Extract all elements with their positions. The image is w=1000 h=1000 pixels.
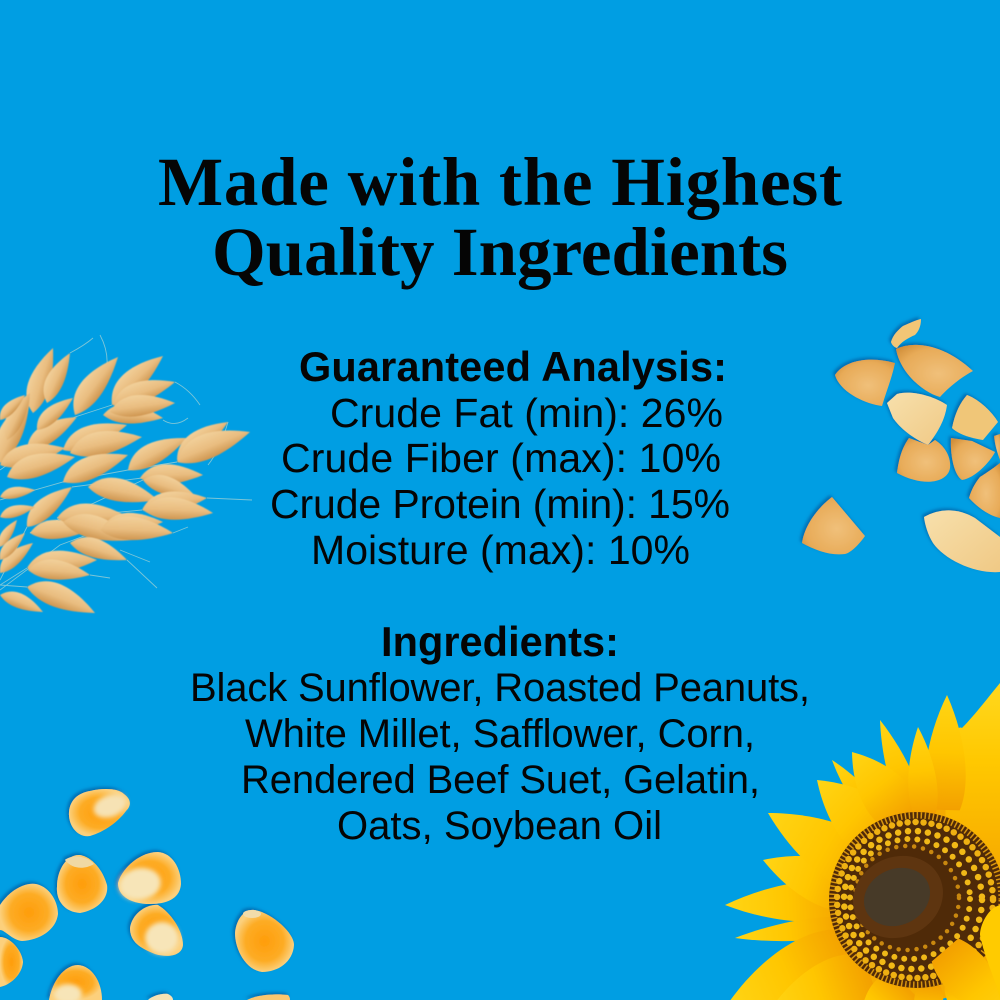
crude protein: Crude Protein (min): 15% [270,481,730,527]
sunflower petals [715,683,1000,1000]
ingredients line 3: Rendered Beef Suet, Gelatin, [241,758,760,802]
ingredients line 2: White Millet, Safflower, Corn, [245,712,755,756]
heading: guaranteed analysis: Guaranteed Analysis: [299,343,727,390]
title [158,144,842,290]
ingredients line 1: Black Sunflower, Roasted Peanuts, [190,666,810,710]
sunflower front petals [927,905,1000,1000]
illustration: peanuts [802,319,1000,572]
illustration: oat sprig [0,335,254,621]
text block: ingredients [190,618,810,848]
illustration: sunflower [715,683,1000,1000]
heading: ingredients: Ingredients: [381,618,619,665]
title: Made with the Highest [158,144,842,220]
title: Quality Ingredients [212,214,788,290]
text block: guaranteed analysis [270,343,730,573]
illustration: corn kernels [0,789,294,1000]
crude fat: Crude Fat (min): 26% [330,390,723,436]
moisture: Moisture (max): 10% [311,527,690,573]
sunflower seed head [829,812,1000,988]
ingredients line 4: Oats, Soybean Oil [337,804,662,848]
crude fiber: Crude Fiber (max): 10% [281,435,721,481]
